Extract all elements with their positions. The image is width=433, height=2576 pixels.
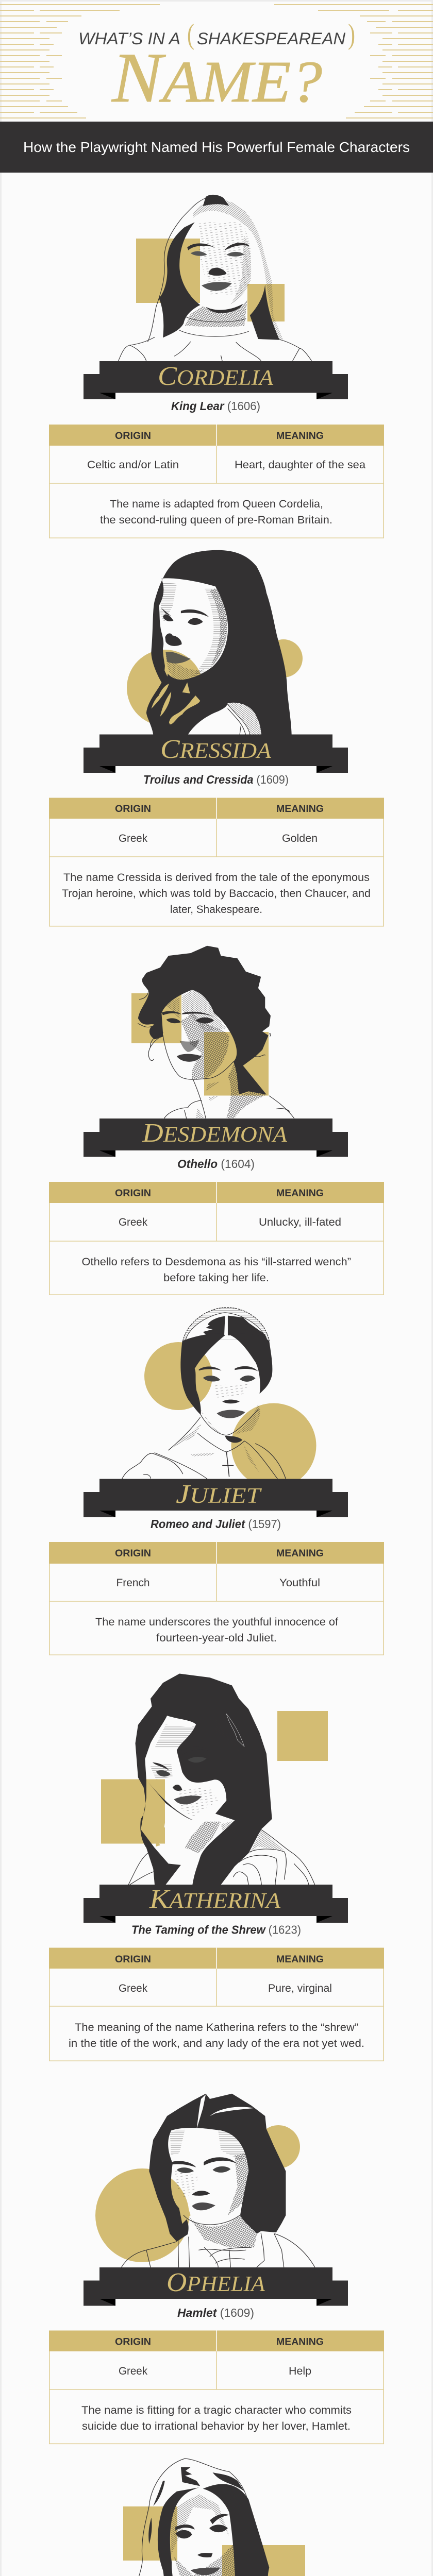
section: Ophelia	[49, 2094, 384, 2444]
gold circles: Juliet	[144, 1342, 317, 1488]
title: )	[348, 19, 355, 50]
portrait: Juliet	[122, 1308, 286, 1479]
section: Cordelia	[49, 195, 384, 538]
name banner: Desdemona	[84, 1118, 348, 1157]
table: Cressida: Golden	[282, 833, 318, 844]
title: WHAT’S IN A	[78, 29, 180, 48]
table: Desdemona: ORIGIN	[115, 1188, 151, 1199]
portrait: Cressida	[146, 550, 292, 735]
table: Cordelia: the second-ruling queen of pre-Roman Britain.	[100, 514, 332, 526]
table: Ophelia: ORIGIN	[115, 2337, 151, 2347]
name banner: Cordelia: CORDELIA	[158, 362, 273, 391]
play: The Taming of the Shrew: The Taming of the Shrew (1623)	[131, 1923, 301, 1936]
table: Ophelia	[49, 2331, 384, 2444]
title	[78, 19, 355, 117]
name banner: Cordelia	[84, 361, 348, 399]
table: Cordelia: The name is adapted from Queen Cordelia,	[110, 498, 323, 510]
portrait: Katherina	[128, 1673, 315, 1885]
title: SHAKESPEAREAN	[197, 29, 346, 48]
table: Katherina: The meaning of the name Katherina refers to the “shrew”	[75, 2022, 358, 2033]
portrait: Ophelia	[122, 2094, 315, 2267]
table: Ophelia: Greek	[119, 2365, 147, 2377]
table: Juliet	[49, 1542, 384, 1655]
table: Desdemona: MEANING	[276, 1188, 324, 1199]
table: Cordelia: ORIGIN	[115, 431, 151, 442]
table: Katherina: Greek	[119, 1982, 147, 1994]
table: Desdemona: before taking her life.	[163, 1272, 269, 1284]
play: King Lear: King Lear (1606)	[171, 399, 260, 413]
name banner: Katherina	[84, 1885, 348, 1923]
play: Hamlet: Hamlet (1609)	[177, 2306, 254, 2319]
table: Juliet: French	[116, 1577, 149, 1589]
table: Cressida: The name Cressida is derived from the tale of the eponymous	[63, 872, 370, 884]
table: Juliet: ORIGIN	[115, 1548, 151, 1559]
table: Desdemona: Othello refers to Desdemona as his “ill-starred wench”	[81, 1256, 351, 1268]
table: Katherina: ORIGIN	[115, 1954, 151, 1965]
name banner: Ophelia	[84, 2267, 348, 2306]
table: Desdemona: Greek	[119, 1216, 147, 1228]
portrait: Desdemona	[138, 946, 294, 1118]
table: Cordelia: Heart, daughter of the sea	[235, 459, 365, 471]
table: Katherina: Pure, virginal	[268, 1982, 332, 1994]
table: Juliet: MEANING	[276, 1548, 324, 1559]
table: Cordelia: MEANING	[276, 431, 324, 442]
table: Juliet: fourteen-year-old Juliet.	[156, 1632, 277, 1644]
table: Ophelia: MEANING	[276, 2337, 324, 2347]
play: Troilus and Cressida: Troilus and Cressida (1609)	[143, 773, 289, 786]
table: Cressida	[49, 798, 384, 926]
table: Cressida: later, Shakespeare.	[170, 904, 262, 916]
gold squares: Desdemona	[131, 993, 269, 1095]
name banner: Juliet	[84, 1479, 348, 1517]
section: Portia	[43, 2459, 390, 2576]
table: Cressida: Greek	[119, 833, 147, 844]
table: Cordelia	[49, 425, 384, 538]
name banner: Cressida	[84, 735, 348, 773]
gold squares: Cordelia	[136, 239, 285, 321]
section: Juliet	[49, 1308, 384, 1655]
table: Ophelia: The name is fitting for a tragic character who commits	[81, 2404, 352, 2416]
name banner: Cressida: CRESSIDA	[160, 735, 271, 764]
table: Katherina	[49, 1948, 384, 2061]
table: Ophelia: suicide due to irrational behavior by her lover, Hamlet.	[82, 2420, 351, 2432]
subtitle band: How the Playwright Named His Powerful Female Characters	[23, 139, 410, 155]
subtitle band	[0, 122, 433, 173]
table: Cressida: Trojan heroine, which was told by Baccacio, then Chaucer, and	[62, 888, 371, 900]
table: Katherina: in the title of the work, and any lady of the era not yet wed.	[69, 2038, 364, 2049]
portrait: Cordelia	[118, 195, 311, 361]
section: Cressida	[49, 550, 384, 926]
name banner: Desdemona: DESDEMONA	[142, 1118, 287, 1148]
table: Cressida: MEANING	[276, 804, 324, 815]
section: Katherina	[49, 1673, 384, 2061]
section: Desdemona	[49, 946, 384, 1295]
table: Ophelia: Help	[289, 2365, 311, 2377]
table: Cordelia: Celtic and/or Latin	[87, 459, 179, 471]
gold circles: Ophelia	[95, 2125, 300, 2262]
portrait: Portia	[105, 2459, 332, 2576]
gold squares: Portia	[123, 2506, 305, 2576]
play: Romeo and Juliet: Romeo and Juliet (1597)	[151, 1517, 281, 1531]
play: Othello: Othello (1604)	[177, 1157, 255, 1171]
name banner: Katherina: KATHERINA	[149, 1885, 280, 1914]
gold circles: Cressida	[127, 639, 303, 726]
table: Cressida: ORIGIN	[115, 804, 151, 815]
gold squares: Katherina	[101, 1711, 328, 1843]
title: NAME?	[111, 38, 322, 117]
table: Juliet: Youthful	[279, 1577, 320, 1589]
name banner: Juliet: JULIET	[176, 1480, 262, 1509]
table: Desdemona	[49, 1182, 384, 1295]
table: Katherina: MEANING	[276, 1954, 324, 1965]
table: Juliet: The name underscores the youthful innocence of	[95, 1616, 338, 1628]
decorative header lines	[0, 4, 433, 118]
title: (	[187, 19, 194, 50]
table: Desdemona: Unlucky, ill-fated	[259, 1216, 341, 1228]
name banner: Ophelia: OPHELIA	[166, 2268, 265, 2297]
